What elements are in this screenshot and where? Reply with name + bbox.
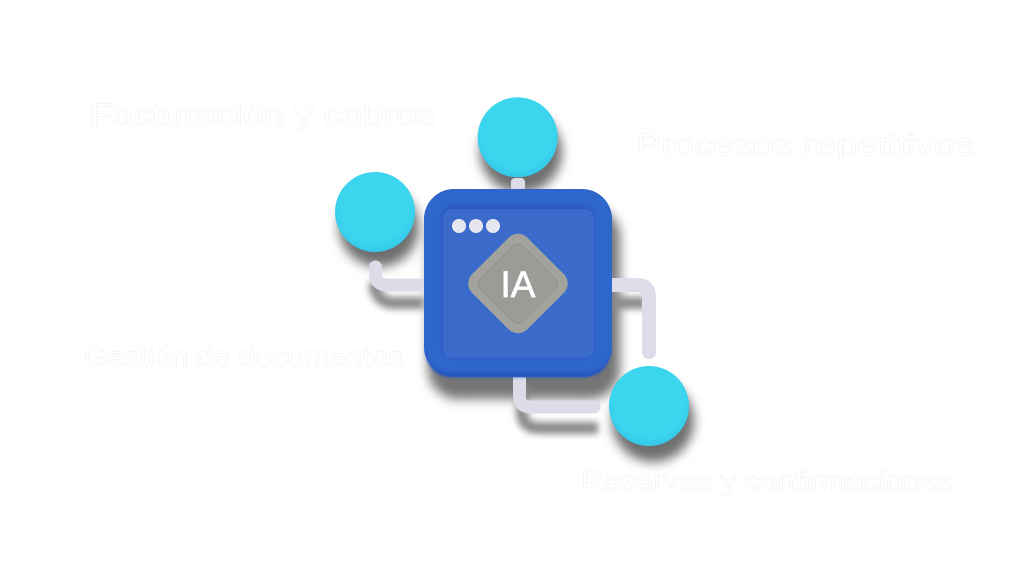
- icon: IA diamond: [463, 228, 573, 339]
- connector: right: [610, 285, 649, 352]
- circle: bottom-right node: [609, 366, 689, 446]
- text: IA: IA: [501, 264, 536, 305]
- window panel: [424, 189, 612, 377]
- connector: top: [511, 178, 525, 192]
- connector: left: [376, 267, 425, 285]
- label: Facturación y cobros: Facturación y cobros: [90, 97, 435, 132]
- label: Gestión de documentos: Gestión de documentos: [84, 341, 403, 372]
- shadows: [339, 111, 694, 462]
- circle: top node: [478, 97, 558, 177]
- label: Reservas y confirmaciones: Reservas y confirmaciones: [581, 465, 953, 496]
- connector: bottom: [520, 372, 594, 407]
- label: Procesos repetitivos: Procesos repetitivos: [636, 127, 974, 162]
- icon: window dots: [452, 219, 500, 233]
- circle: left node: [335, 172, 415, 252]
